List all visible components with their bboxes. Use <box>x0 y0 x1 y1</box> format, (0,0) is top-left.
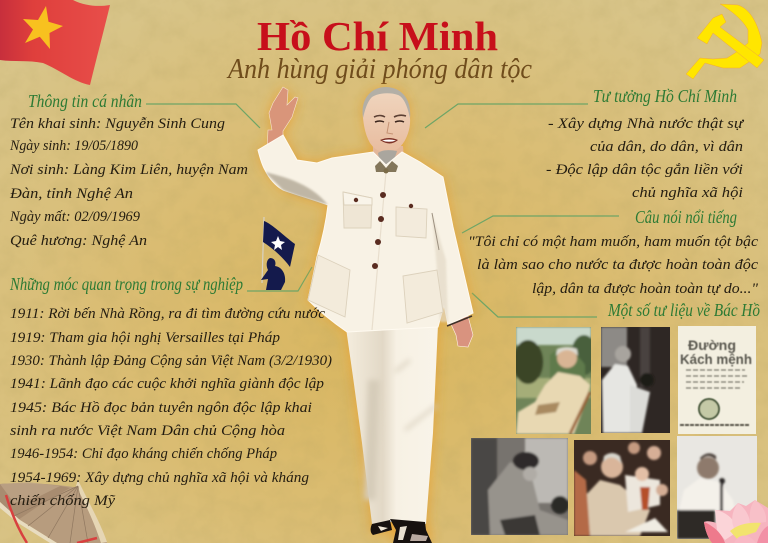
right hand <box>450 316 473 347</box>
jacket buttons <box>354 168 413 269</box>
text block: quote <box>468 234 759 297</box>
text block: timeline <box>10 306 332 509</box>
panel: career milestones <box>9 274 332 509</box>
icon: hammer and sickle <box>686 4 764 79</box>
portrait figure: Hồ Chí Minh waving <box>258 87 473 543</box>
text block: personal details: Tên khai sinh: Nguyễn Sinh Cung <box>10 116 226 132</box>
icon: conical hat <box>0 480 107 543</box>
photo: greeting a child <box>601 327 670 433</box>
text block: personal details: Quê hương: Nghệ An <box>10 233 147 249</box>
heading: Ho Chi Minh thought: Tư tưởng Hồ Chí Minh <box>593 86 737 106</box>
connector lines <box>146 104 619 317</box>
text block: timeline: chiến chống Mỹ <box>10 493 115 509</box>
icon: lotus flower <box>704 500 768 543</box>
photo: speaking at microphone <box>677 436 757 539</box>
raised hand <box>267 87 298 152</box>
heading: career milestones: Những móc quan trọng trong sự nghiệp <box>9 274 243 294</box>
photo: with soldiers <box>471 438 569 535</box>
text block: thought: chủ nghĩa xã hội <box>632 185 743 201</box>
text block: thought: - Xây dựng Nhà nước thật sự <box>548 116 745 132</box>
photo: Đường Kách mệnh book cover: Kách mệnh <box>680 351 752 367</box>
panel: Ho Chi Minh thought <box>546 86 745 201</box>
text block: quote: "Tôi chỉ có một ham muốn, ham muốn tột bậc <box>468 234 758 250</box>
panel: personal information <box>9 91 248 249</box>
sandals <box>371 519 432 543</box>
panel: famous quote <box>468 207 759 297</box>
jacket <box>258 135 473 332</box>
text block: timeline: 1945: Bác Hồ đọc bản tuyên ngôn độc lập khai <box>10 400 312 416</box>
photo: Đường Kách mệnh book cover <box>678 326 756 434</box>
text block: personal details <box>9 116 248 249</box>
head <box>363 87 410 170</box>
photo: seated in garden <box>516 327 591 434</box>
photo: Đường Kách mệnh book cover: Đường <box>688 337 736 353</box>
subtitle: Anh hùng giải phóng dân tộc <box>226 54 533 85</box>
jacket shading <box>265 172 472 330</box>
text block: thought <box>546 116 745 201</box>
icon: small flag bearer silhouette <box>261 217 295 290</box>
trousers <box>346 325 438 524</box>
title: Hồ Chí Minh <box>257 13 498 59</box>
text block: thought: - Độc lập dân tộc gắn liền với <box>546 162 743 178</box>
text block: timeline: sinh ra nước Việt Nam Dân chủ Cộng hòa <box>10 423 285 439</box>
figure glow <box>258 87 473 543</box>
text block: timeline: 1930: Thành lập Đảng Cộng sản Việt Nam (3/2/1930) <box>10 353 332 369</box>
collar <box>375 161 398 172</box>
trouser folds <box>370 360 437 500</box>
text block: personal details: Ngày mất: 02/09/1969 <box>9 209 140 225</box>
text block: quote: là làm sao cho nước ta được hoàn toàn độc <box>477 257 758 273</box>
icon: Vietnamese flag <box>0 0 110 85</box>
text block: personal details: Nơi sinh: Làng Kim Liên, huyện Nam <box>9 162 248 178</box>
text block: personal details: Đàn, tỉnh Nghệ An <box>9 186 133 202</box>
panel: documents about Uncle Ho <box>471 300 760 539</box>
text block: quote: lập, dân ta được hoàn toàn tự do..." <box>532 281 759 297</box>
photo: with children <box>574 440 670 536</box>
heading: personal information: Thông tin cá nhân <box>28 91 142 111</box>
text block: timeline: 1954-1969: Xây dựng chủ nghĩa xã hội và kháng <box>10 470 309 486</box>
jacket pockets <box>308 192 443 323</box>
text block: thought: của dân, do dân, vì dân <box>590 139 743 155</box>
heading: famous quote: Câu nói nổi tiếng <box>635 207 737 227</box>
text block: personal details: Ngày sinh: 19/05/1890 <box>9 138 138 154</box>
text block: timeline: 1946-1954: Chỉ đạo kháng chiến chống Pháp <box>10 446 277 462</box>
text block: timeline: 1919: Tham gia hội nghị Versailles tại Pháp <box>10 330 281 346</box>
text block: timeline: 1941: Lãnh đạo các cuộc khởi nghĩa giành độc lập <box>10 376 325 392</box>
text block: timeline: 1911: Rời bến Nhà Rồng, ra đi tìm đường cứu nước <box>10 306 325 322</box>
